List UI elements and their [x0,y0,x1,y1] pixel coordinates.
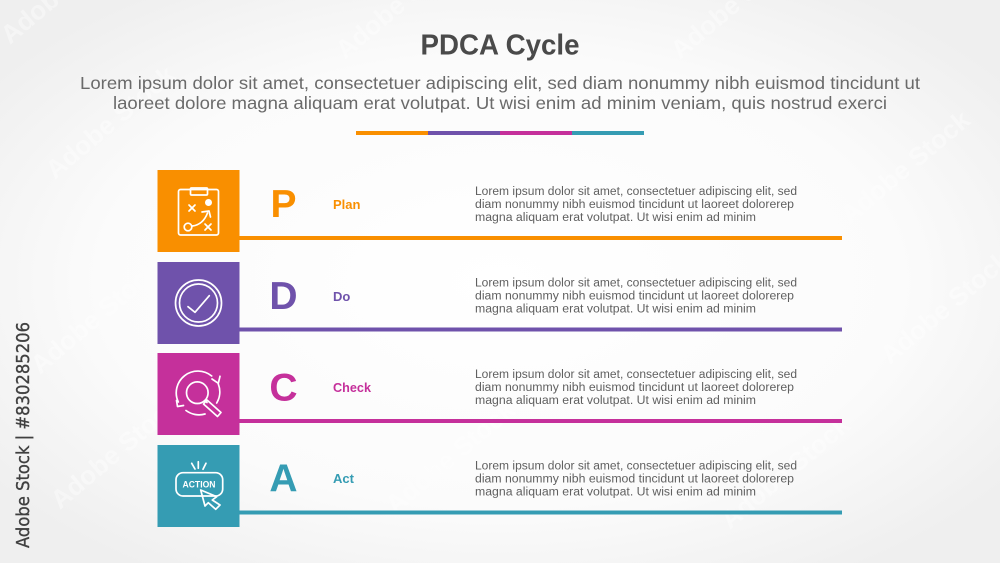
description: Lorem ipsum dolor sit amet, consectetuer adipiscing elit, sed [475,369,797,381]
underline [240,236,842,240]
row: do [158,262,842,344]
icon tile: magnifier cycle [158,353,240,435]
icon tile: action button [158,445,240,527]
label: Check: Check [333,380,372,395]
faint watermark: Adobe Stock [380,394,521,520]
subtitle: Lorem ipsum dolor sit amet, consectetuer adipiscing elit, sed diam nonummy nibh euismod tincidunt ut [80,73,920,93]
description [475,460,797,498]
underline [240,328,842,332]
faint watermark: Adobe Stock [25,254,166,380]
description: Lorem ipsum dolor sit amet, consectetuer adipiscing elit, sed [475,278,797,290]
description [475,278,797,316]
label: Plan: Plan [333,197,361,212]
description: diam nonummy nibh euismod tincidunt ut laoreet dolorerep [475,290,794,302]
underline [240,419,842,423]
faint watermark: Adobe Stock [45,389,186,515]
letter C: C [269,366,298,410]
row: act [158,445,842,527]
row: check [158,353,842,435]
description: diam nonummy nibh euismod tincidunt ut laoreet dolorerep [475,474,794,486]
description: diam nonummy nibh euismod tincidunt ut laoreet dolorerep [475,382,794,394]
label: Act: Act [333,471,355,486]
description: magna aliquam erat volutpat. Ut wisi enim ad minim [475,395,756,407]
title: PDCA Cycle [420,30,580,62]
description: magna aliquam erat volutpat. Ut wisi enim ad minim [475,304,756,316]
icon tile: action button: ACTION [182,480,216,490]
faint watermark: Adobe Stock [715,409,856,535]
description [475,369,797,407]
letter A: A [269,458,298,500]
subtitle [80,73,920,113]
subtitle: laoreet dolore magna aliquam erat volutpat. Ut wisi enim ad minim veniam, quis nostrud exerci [113,93,887,113]
description: Lorem ipsum dolor sit amet, consectetuer adipiscing elit, sed [475,460,797,472]
description: diam nonummy nibh euismod tincidunt ut laoreet dolorerep [475,199,794,211]
faint watermark: Adobe Stock [835,104,976,230]
description [475,186,797,224]
description: magna aliquam erat volutpat. Ut wisi enim ad minim [475,486,756,498]
description: Lorem ipsum dolor sit amet, consectetuer adipiscing elit, sed [475,186,797,198]
letter P: P [270,183,297,226]
icon tile: check badge [158,262,240,344]
description: magna aliquam erat volutpat. Ut wisi enim ad minim [475,212,756,224]
colored divider [356,131,644,135]
faint watermark: Adobe Stock [40,59,181,185]
underline [240,510,842,514]
row: plan [158,170,842,252]
icon tile: clipboard strategy [158,170,240,252]
vertical stock caption: Adobe Stock | #830285206 [13,322,34,548]
label: Do: Do [333,289,350,304]
letter D: D [269,275,298,318]
